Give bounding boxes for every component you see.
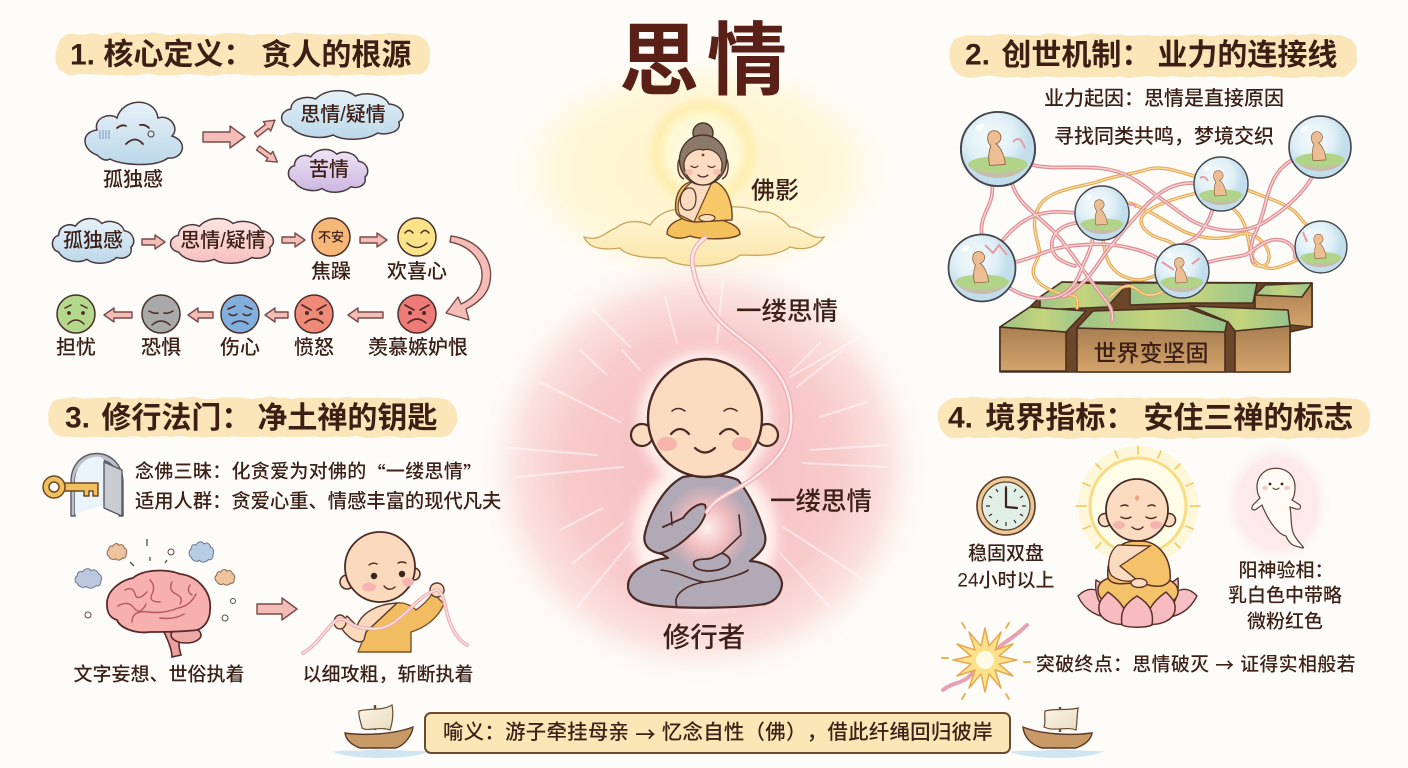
label: subdue: 以细攻粗，斩断执着	[302, 664, 474, 686]
icon: key	[43, 476, 98, 498]
yellow glow behind Buddha	[495, 48, 905, 292]
arrow	[142, 235, 165, 249]
pink glow with rays	[478, 250, 928, 686]
text: karma cause: 业力起因：思情是直接原因	[1044, 87, 1284, 110]
title: 思情	[619, 16, 795, 106]
face: anxious: 不安	[318, 230, 344, 244]
icon: left boat	[333, 705, 430, 758]
arrow	[282, 233, 305, 247]
icon: right boat	[1010, 707, 1105, 758]
label: 24h: 24小时以上	[957, 570, 1055, 592]
arrow	[360, 233, 387, 247]
panel: 4 realm indicators	[938, 398, 1370, 699]
label: slightly pink: 微粉红色	[1247, 610, 1323, 632]
heading 2: 2. 创世机制：业力的连接线	[965, 38, 1337, 72]
illustration: Buddha halo	[645, 94, 761, 210]
illustration: monk with thread	[303, 532, 467, 653]
arrow	[104, 308, 132, 322]
label: lonely: 孤独感	[103, 168, 163, 191]
arrow: up right	[252, 115, 279, 140]
banner box	[425, 713, 1010, 753]
label: delusions: 文字妄想、世俗执着	[73, 664, 245, 686]
illustration: meditating monk	[628, 359, 782, 608]
label: joy: 欢喜心	[387, 260, 447, 283]
face: sad	[221, 295, 259, 333]
arrow: curved	[446, 236, 491, 320]
arrow: big right	[203, 126, 245, 148]
face: fear	[142, 295, 180, 333]
cloud: 思情/疑情	[282, 91, 403, 139]
panel: 2 creation mechanism	[949, 35, 1357, 372]
banner text: 喻义：游子牵挂母亲 → 忆念自性（佛），借此纤绳回归彼岸	[443, 718, 993, 748]
chain: cloud 思情/疑情	[171, 219, 273, 263]
icon: lonely cloud	[85, 102, 182, 165]
thread: one strand of longing	[692, 238, 791, 512]
footer: metaphor banner	[333, 705, 1105, 758]
illustration: Buddha	[667, 123, 740, 239]
illustration: halo monk on lotus	[1076, 446, 1200, 627]
text: nianfo: 念佛三昧：化贪爱为对佛的“一缕思情”	[135, 458, 482, 486]
panel: 1 core definition	[52, 34, 491, 359]
label: envy: 羡慕嫉妒恨	[368, 336, 468, 359]
label: milk white: 乳白色中带略	[1228, 584, 1342, 606]
heading 4: 4. 境界指标： 安住三禅的标志	[948, 402, 1353, 434]
label: sad: 伤心	[220, 336, 260, 359]
text: resonance: 寻找同类共鸣，梦境交织	[1054, 125, 1274, 148]
illustration: yang spirit ghost	[1221, 439, 1333, 567]
cloud: 思情/疑情: 思情/疑情	[300, 103, 386, 126]
threads: orange	[1033, 168, 1307, 308]
face: envy	[398, 295, 436, 333]
icon: clock	[977, 477, 1035, 535]
label: anger: 愤怒	[294, 336, 334, 359]
heading 3: 3. 修行法门：净土禅的钥匙	[65, 402, 437, 434]
illustration: white aura around monk	[633, 352, 777, 610]
cloud: 苦情: 苦情	[309, 158, 349, 181]
illustration: brain with thoughts	[75, 539, 235, 657]
label: anxious: 焦躁	[311, 260, 351, 283]
label: fear: 恐惧	[141, 336, 181, 359]
chain: cloud 孤独感	[52, 219, 134, 263]
illustration: golden cloud	[584, 207, 824, 266]
icon: thread breaking burst	[942, 623, 1030, 699]
arrow: down right	[254, 143, 281, 167]
text: suitable people: 适用人群：贪爱心重、情感丰富的现代凡夫	[135, 490, 501, 512]
chain: cloud 孤独感: 孤独感	[63, 229, 123, 252]
icon: door	[71, 454, 123, 516]
face: anger	[295, 295, 333, 333]
cloud: 苦情	[288, 149, 368, 192]
text: breakthrough: 突破终点：思情破灭 → 证得实相般若	[1036, 650, 1356, 678]
label: practitioner: 修行者	[663, 622, 745, 652]
panel: 3 practice method	[43, 398, 501, 686]
chain: cloud 思情/疑情: 思情/疑情	[180, 229, 266, 252]
label: worry: 担忧	[56, 336, 96, 359]
heading 1: 1. 核心定义： 贪人的根源	[70, 38, 411, 72]
arrow	[188, 308, 213, 322]
arrow	[265, 308, 288, 322]
illustration: solid world land	[1000, 282, 1312, 372]
arrow	[257, 598, 297, 620]
arrow	[348, 308, 383, 322]
threads: pink	[981, 160, 1312, 321]
face: anxious	[312, 218, 350, 256]
label: double lotus: 稳固双盘	[968, 542, 1044, 564]
label: strand lower: 一缕思情	[770, 488, 872, 516]
bubble worlds	[949, 112, 1351, 301]
face: joy	[398, 218, 436, 256]
label: Buddha shadow: 佛影	[751, 178, 799, 204]
label: strand upper: 一缕思情	[736, 298, 838, 326]
face: worry	[57, 295, 95, 333]
panel: center figures	[584, 94, 872, 652]
label: yang spirit: 阳神验相：	[1238, 560, 1334, 582]
label: world solidifies: 世界变坚固	[1094, 340, 1208, 366]
